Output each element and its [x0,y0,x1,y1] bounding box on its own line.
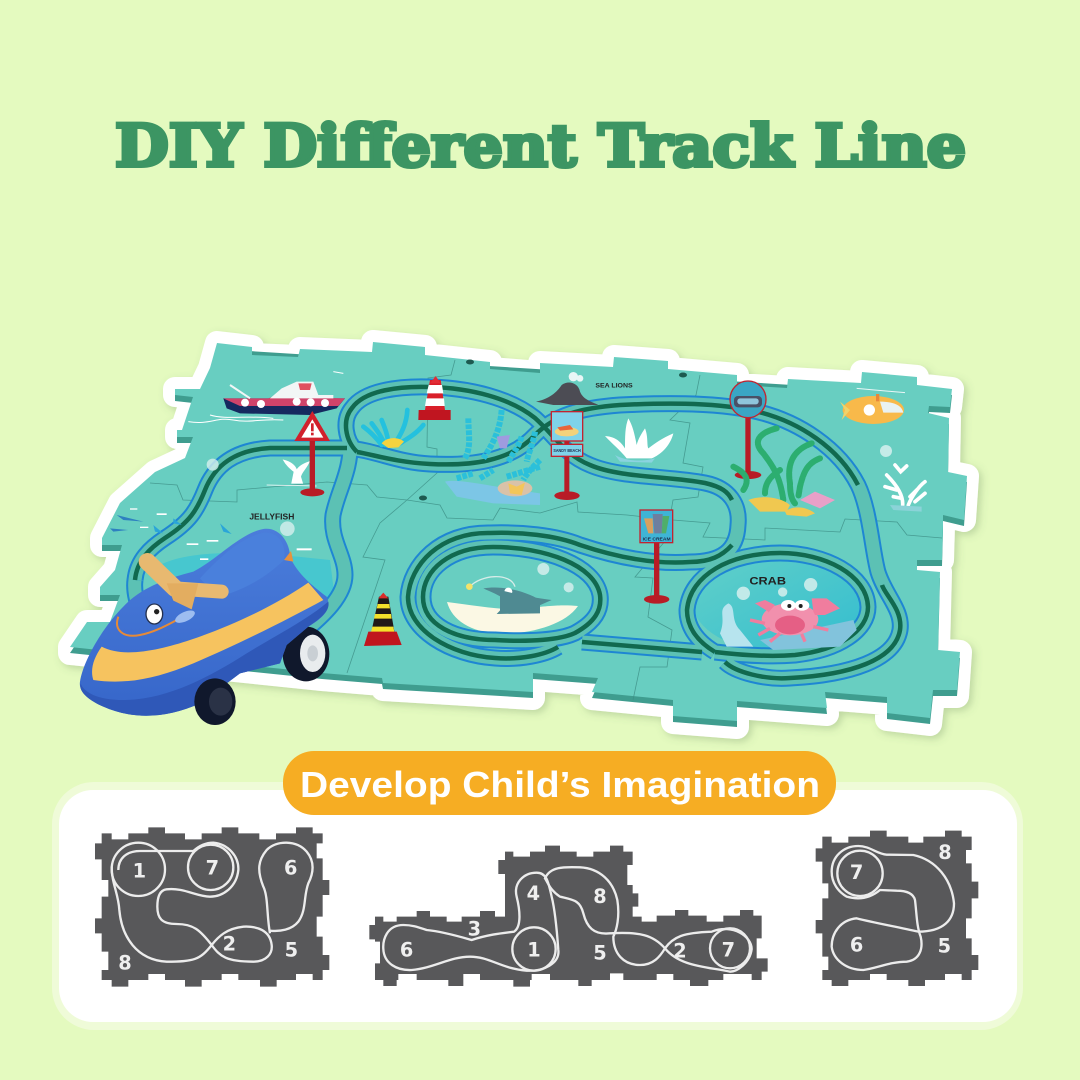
icon: white coral [605,418,673,458]
puzzle peg holes [419,360,687,500]
smile [117,617,180,636]
track numbers: 1 [527,938,541,961]
track numbers: 1 [133,859,146,882]
track grooves [135,387,900,678]
rear wheel [283,627,329,681]
panel halo [52,782,1023,1030]
icon: snorkel sign [730,381,766,479]
track numbers: 8 [593,885,607,908]
track numbers: 6 [850,934,863,957]
icon: yellow shell [382,438,404,448]
icon: anglerfish tail [500,590,552,613]
track numbers: 7 [850,861,863,884]
icon: sandy beach sign [551,412,583,500]
track numbers [118,857,298,975]
track numbers [400,882,735,965]
hood highlight [173,608,197,625]
track numbers: 5 [285,938,298,961]
label: jellyfish: JELLYFISH [249,511,294,521]
track numbers [850,841,952,957]
icon: black and yellow traffic cone [364,593,402,646]
board side thickness [70,349,967,727]
icon: pink shell [800,492,835,508]
icon: whale tail [267,460,317,486]
icon: crab [720,598,857,650]
front wheel [194,678,236,725]
icon: warning sign [294,411,330,496]
puzzle seams [150,360,942,700]
jet ski toy car [80,529,329,725]
board top face [70,342,967,721]
right board illustrations [500,372,925,650]
label: ice cream: ICE CREAM [643,536,671,541]
lagoon water under jet ski [160,553,335,640]
tracks [135,387,900,678]
subtitle pill [283,751,836,815]
icon: red traffic cone [418,376,451,420]
seat [200,533,285,593]
track numbers: 5 [593,942,607,965]
handlebar [147,562,222,609]
icon: bubbles [207,459,295,536]
track layout 2 [369,846,768,987]
puzzle track board [70,342,967,727]
track dark centre lines [135,387,900,678]
icon: green seaweed [733,428,820,503]
icon: sea lion [536,372,598,405]
pill text: Develop Child’s Imagination [300,764,820,805]
icon: ice cream sign [640,510,673,604]
lower hull shading [80,602,329,716]
track numbers: 6 [284,857,297,880]
jet ski hull [80,529,328,716]
track layout 1 [95,827,329,987]
track blue rails [135,387,900,678]
label: sea lions: SEA LIONS [595,382,633,389]
track numbers: 8 [938,841,952,864]
panel white card [59,790,1017,1022]
track numbers: 3 [468,918,481,941]
icon: fish school [110,508,312,560]
bottom panel [52,782,1023,1030]
yellow stripe [92,583,323,682]
icon: yellow rocks [748,497,815,517]
track numbers: 8 [118,952,132,975]
title: DIY Different Track Line [115,112,966,180]
board white sticker outline [70,342,967,727]
icon: submarine [840,388,905,424]
track numbers: 7 [722,938,735,961]
icon: rescue ship [188,372,345,422]
label: sandy beach: SANDY BEACH [553,448,581,453]
orange tail light [284,551,293,562]
icon: white plant [885,465,925,505]
crab lagoon [693,555,863,651]
track numbers: 4 [527,882,540,905]
eye [146,604,163,624]
track numbers: 7 [206,857,219,880]
track numbers: 5 [938,934,951,957]
label: crab: CRAB [749,576,786,588]
pill background [283,751,836,815]
icon: bubbles [537,445,892,600]
track numbers: 6 [400,938,413,961]
track numbers: 2 [223,933,236,956]
track numbers: 2 [673,939,687,962]
icon: blue coral reef [445,410,540,505]
track layout 3 [816,831,978,986]
icon: cyan seaweed [363,410,423,445]
left board illustrations [110,372,540,646]
icon: anglerfish [466,577,540,614]
anglerfish lagoon sand [447,602,578,634]
